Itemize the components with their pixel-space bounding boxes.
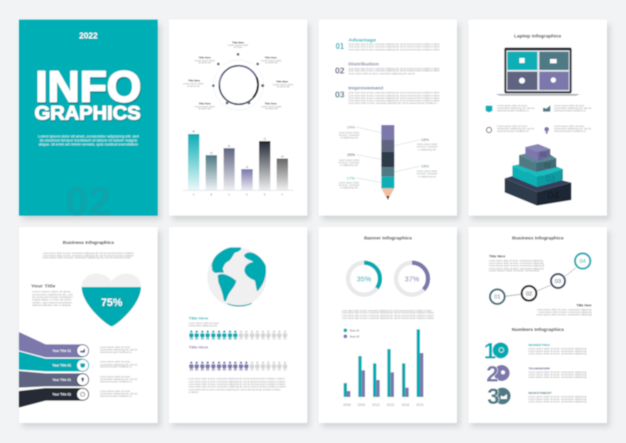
globe page text xyxy=(189,378,287,394)
ribbon descriptions: eiusmod tempor incididunt ut xyxy=(100,395,132,398)
list: advantage: Lorem ipsum dolor sit amet, consectetur adipiscing elit, sed do eiusmod tempor incididunt ut labore xyxy=(348,43,440,46)
bar chart: B xyxy=(211,194,213,196)
bar chart: 53 xyxy=(210,153,213,155)
panel: banner page xyxy=(319,227,457,423)
radial labels: Title Here xyxy=(188,79,201,83)
right pencil labels: sit amet, consectet xyxy=(417,146,438,149)
banner text xyxy=(342,309,435,320)
3D pyramid: 04 xyxy=(547,190,559,202)
list: advantage: Lorem ipsum dolor sit amet, consectetur adipiscing elit, sed do eiusmod tempor incididunt ut labore xyxy=(348,46,440,49)
list: advantage: 01 xyxy=(336,42,345,51)
laptop legend text: eiusmod tempor incididunt ut xyxy=(554,109,586,112)
list: distribution: 02 xyxy=(335,66,345,75)
bar chart: 64 xyxy=(228,146,231,148)
left pencil labels: ur adipiscing elit xyxy=(340,137,358,140)
radial labels: Title Here xyxy=(199,55,211,59)
left pencil labels: 17% xyxy=(347,175,355,180)
left pencil labels: ur adipiscing elit xyxy=(340,164,358,167)
cover text block: Lorem ipsum dolor sit amet, consectetur adipiscing elit, sed xyxy=(38,135,139,139)
your title block: Your Title xyxy=(31,284,56,289)
radial labels: Title Here xyxy=(232,40,245,44)
panel: business heart page xyxy=(19,227,158,423)
bar chart: 32 xyxy=(246,167,249,169)
title block top: Lorem ipsum dolor sit amet, consectetur adipiscing xyxy=(489,265,545,268)
left pencil labels: Lorem ipsum dolor xyxy=(339,182,359,185)
left pencil labels: 26% xyxy=(347,152,355,157)
step path: 03 xyxy=(555,279,561,285)
laptop legend text: Lorem ipsum dolor sit amet, xyxy=(554,125,585,128)
investment item: Lorem ipsum dolor sit amet, consectetur adipiscing xyxy=(528,400,587,403)
right pencil labels xyxy=(417,137,438,178)
list: distribution: Lorem ipsum dolor sit amet, consectetur adipiscing elit, sed do eiusmod tempor incididunt ut labore xyxy=(348,67,440,70)
ribbon descriptions: Lorem ipsum dolor sit amet, xyxy=(100,346,131,349)
laptop legend text: eiusmod tempor incididunt ut xyxy=(497,130,529,133)
marketing item: Lorem ipsum dolor sit amet, consectetur adipiscing xyxy=(528,352,587,355)
panel: business and numbers page xyxy=(468,227,607,423)
step path: 04 xyxy=(580,259,586,265)
bar chart: A xyxy=(193,193,195,196)
radial labels xyxy=(183,40,293,111)
right pencil labels: ur adipiscing elit xyxy=(418,175,436,178)
title block top: Lorem ipsum dolor sit amet, consectetur adipiscing xyxy=(489,259,544,262)
globe page text: Lorem ipsum dolor sit amet, consectetur adipiscing elit, sed do eiusmod tempor incididunt ut labore xyxy=(189,380,286,383)
intro text: Lorem ipsum dolor sit amet, consectetur adipiscing elit, sed do eiusmod tempor incididunt xyxy=(43,252,134,255)
laptop legend text: Lorem ipsum dolor sit amet, xyxy=(497,125,528,128)
ribbon descriptions: consectetur adipiscing elit, sed do xyxy=(100,363,138,366)
globe page text: ut labore. xyxy=(189,391,199,394)
banner text: Lorem ipsum dolor sit amet, consectetur adipiscing elit, sed do eiusmod tempor incididunt ut labore xyxy=(342,312,435,315)
title block top xyxy=(489,254,545,273)
bar chart: 48 xyxy=(281,156,284,158)
investment item: INVESTMENT xyxy=(528,391,552,395)
title block bottom xyxy=(536,303,592,317)
radial labels: Lorem ipsum dolor xyxy=(194,59,215,62)
number 1 xyxy=(484,339,509,364)
list: improvement: Lorem ipsum dolor sit amet, consectetur adipiscing elit, sed do eiusmod tempor incididunt ut labore xyxy=(348,97,440,100)
right pencil labels: sit amet, consectet xyxy=(417,173,438,176)
your title block: magna aliqua, ut enim ad minim xyxy=(32,299,71,302)
laptop legend text: Lorem ipsum dolor sit amet, xyxy=(554,104,585,107)
laptop legend text: Lorem ipsum dolor sit amet, xyxy=(497,104,528,107)
cover title GRAPHICS: GRAPHICS xyxy=(35,104,141,125)
step path: 01 xyxy=(494,295,500,301)
ribbon descriptions: Lorem ipsum dolor sit amet, xyxy=(100,361,131,364)
left pencil labels xyxy=(339,125,360,190)
number 1: 1 xyxy=(484,339,496,364)
radial labels: Lorem ipsum dolor xyxy=(194,105,215,108)
cover title INFO: INFO xyxy=(36,65,142,113)
cover title INFO: INFO xyxy=(35,64,141,112)
list: distribution: Distribution xyxy=(348,62,379,68)
donut 37%: 37% xyxy=(405,275,420,284)
3D pyramid: 03 xyxy=(546,174,555,184)
marketing item: Lorem ipsum dolor sit amet, consectetur adipiscing xyxy=(528,350,587,353)
list: distribution xyxy=(335,62,440,75)
teamwork item: Lorem ipsum dolor sit amet, consectetur adipiscing xyxy=(528,374,587,377)
donut 35%: 35% xyxy=(357,275,372,284)
right pencil labels: 18% xyxy=(421,137,429,142)
investment item: Lorem ipsum dolor sit amet, consectetur adipiscing xyxy=(528,395,587,398)
bar chart: 75 xyxy=(263,139,267,141)
grouped bar chart: 2012 xyxy=(372,403,380,407)
heading: Banner Infographics xyxy=(364,235,412,240)
left pencil labels: Lorem ipsum dolor xyxy=(339,131,359,134)
globe page text: Lorem ipsum dolor sit amet, consectetur adipiscing elit, sed do eiusmod tempor incididunt ut labore xyxy=(189,386,287,389)
radial labels: Lorem ipsum dolor xyxy=(261,59,282,62)
left pencil labels: sit amet, consectet xyxy=(339,134,360,137)
intro text: Lorem ipsum dolor sit amet, consectetur adipiscing elit, sed do eiusmod tempor incididunt xyxy=(43,254,134,257)
panel: radial and bar chart page xyxy=(169,20,307,216)
panel: cover xyxy=(19,20,158,224)
grouped bar chart: 2006 xyxy=(343,403,351,407)
investment item xyxy=(528,391,587,403)
radial labels: sit amet elit xyxy=(265,108,278,111)
your title block: do eiusmod tempor incididunt xyxy=(32,296,73,299)
laptop legend text: eiusmod tempor incididunt ut xyxy=(554,130,586,133)
grouped bar chart: 2018 xyxy=(401,403,409,407)
grouped bar chart: 2009 xyxy=(357,403,365,407)
ribbon descriptions: eiusmod tempor incididunt ut xyxy=(100,351,132,354)
heart gauge xyxy=(82,274,141,326)
radial labels: Title Here xyxy=(265,55,277,59)
people row 1 xyxy=(189,330,287,340)
banner text: Lorem ipsum dolor sit amet, consectetur adipiscing elit, sed do eiusmod tempor incididunt ut labore xyxy=(342,314,435,317)
bar chart: D xyxy=(246,194,248,196)
globe xyxy=(207,247,267,307)
cover text block: aliqua. Ut enim ad minim veniam, quis nostrud exercitation xyxy=(39,142,138,146)
legend: Step 01 xyxy=(350,328,360,332)
your title block: Lorem ipsum dolor sit amet, xyxy=(32,291,72,294)
ribbon descriptions xyxy=(100,346,138,398)
list: improvement: 03 xyxy=(335,91,345,100)
3D pyramid: 01 xyxy=(541,153,547,159)
panel: advantage and pencil page xyxy=(319,20,457,216)
3D pyramid: 02 xyxy=(544,163,551,169)
cover title GRAPHICS: GRAPHICS xyxy=(35,103,141,124)
banner text: Lorem ipsum dolor sit amet, consectetur adipiscing elit, sed do eiusmod tempor incididunt ut labore xyxy=(342,317,435,320)
pencil callouts xyxy=(356,127,420,182)
title block bottom: Title Here xyxy=(577,303,592,307)
radial labels: Lorem ipsum dolor xyxy=(228,44,248,47)
people row 2 xyxy=(189,361,287,371)
ribbon descriptions: Lorem ipsum dolor sit amet, xyxy=(100,375,131,378)
donut 37% xyxy=(396,263,428,295)
numbers heading: Numbers Infographics xyxy=(512,327,564,332)
radial labels: Lorem ipsum dolor xyxy=(273,83,293,86)
your title block: consectetur adipiscing elit, sed xyxy=(32,293,73,296)
radial labels: sit amet elit xyxy=(265,61,278,64)
cover text block: do eiusmod tempor incididunt ut labore et dolore magna xyxy=(40,138,137,142)
radial diagram xyxy=(212,53,264,110)
radial labels: sit amet elit xyxy=(198,61,211,64)
cover text block xyxy=(38,135,139,146)
radial labels: Lorem ipsum dolor xyxy=(183,83,204,86)
list: distribution: Lorem ipsum dolor sit amet, consectetur adipiscing elit, sed do xyxy=(348,72,416,75)
grouped bar chart: 2015 xyxy=(386,403,394,407)
teamwork item: Lorem ipsum dolor sit amet, consectetur adipiscing xyxy=(528,371,587,374)
grouped bar chart: 2021 xyxy=(416,403,424,407)
intro text: Lorem ipsum dolor sit amet, consectetur adipiscing elit, sed do eiusmod tempor xyxy=(42,257,131,260)
radial labels: sit amet elit xyxy=(198,108,211,111)
title block top: Lorem ipsum dolor sit amet, consectetur adipiscing xyxy=(489,262,544,265)
ribbon steps: Your Title 01 xyxy=(52,349,71,353)
cover year: 2022 xyxy=(79,31,98,41)
marketing item xyxy=(528,343,587,355)
list: improvement: Improvement xyxy=(348,86,384,92)
left pencil labels: ur adipiscing elit xyxy=(340,187,358,190)
bar chart: 85 xyxy=(192,132,196,134)
your title block: ullamco laboris nisi ut aliquip xyxy=(32,304,71,307)
banner text: Lorem ipsum dolor sit amet, consectetur adipiscing elit, sed do eiusmod tempor incididunt ut labore xyxy=(342,309,433,312)
ribbon descriptions: eiusmod tempor incididunt ut xyxy=(100,366,132,369)
people row 1 heading: Lorem ipsum dolor sit amet, xyxy=(189,322,220,325)
radial labels: Title Here xyxy=(276,79,289,83)
pencil xyxy=(381,125,394,200)
list: improvement: Lorem ipsum dolor sit amet, consectetur adipiscing elit, sed do eiusmod tempor incididunt ut labore xyxy=(348,92,440,95)
teamwork item: Lorem ipsum dolor sit amet, consectetur adipiscing xyxy=(528,376,587,379)
globe page text: Lorem ipsum dolor sit amet, consectetur adipiscing elit, sed do eiusmod tempor incididunt ut labore xyxy=(189,383,286,386)
right pencil labels: Lorem ipsum dolor xyxy=(417,170,437,173)
radial labels: sit amet xyxy=(234,46,243,49)
radial labels: sit amet elit xyxy=(277,86,290,89)
laptop legend text: consectetur adipiscing elit, sed do xyxy=(497,107,535,110)
people row 1 heading xyxy=(189,317,220,328)
cover watermark number: 02 xyxy=(66,178,111,224)
laptop legend icons xyxy=(486,105,550,134)
list: improvement xyxy=(335,86,440,105)
step path xyxy=(490,253,590,304)
title block top: Lorem ipsum dolor sit amet, consectetur xyxy=(489,270,540,273)
laptop heading: Laptop Infographics xyxy=(514,34,562,39)
ribbon descriptions: Lorem ipsum dolor sit amet, xyxy=(100,390,131,393)
list: distribution: Lorem ipsum dolor sit amet, consectetur adipiscing elit, sed do eiusmod tempor incididunt ut labore xyxy=(348,70,440,73)
teamwork item xyxy=(528,367,587,379)
left pencil labels: sit amet, consectet xyxy=(339,161,360,164)
ribbon descriptions: eiusmod tempor incididunt ut xyxy=(100,380,132,383)
right pencil labels: ur adipiscing elit xyxy=(418,148,436,151)
laptop legend text: consectetur adipiscing elit, sed do xyxy=(554,128,592,131)
panel: globe and people page xyxy=(169,227,307,423)
bar chart: C xyxy=(228,194,230,196)
bar chart xyxy=(183,132,294,196)
ribbon descriptions: consectetur adipiscing elit, sed do xyxy=(100,393,138,396)
list: improvement: Lorem ipsum dolor sit amet, consectetur adipiscing elit, sed do eiusmod tempor incididunt ut labore xyxy=(348,94,440,97)
heading: Business Infographics xyxy=(512,235,564,240)
list: advantage: Lorem ipsum dolor sit amet, consectetur adipiscing elit, sed do eiusmod tempor incididunt ut labore xyxy=(348,48,440,51)
title block bottom: Lorem ipsum dolor sit amet, consectetur adipiscing xyxy=(536,314,592,317)
teamwork item: TEAMWORK xyxy=(528,367,551,371)
marketing item: MARKETING xyxy=(528,343,551,347)
radial labels: Title Here xyxy=(199,101,211,105)
laptop legend text: consectetur adipiscing elit, sed do xyxy=(554,107,592,110)
title block bottom: Lorem ipsum dolor sit amet, consectetur adipiscing xyxy=(537,308,592,311)
number 3 xyxy=(487,384,511,409)
people row 1 heading: Title Here xyxy=(189,317,208,321)
marketing item: Lorem ipsum dolor sit amet, consectetur adipiscing xyxy=(528,347,587,350)
legend: Step 02 xyxy=(350,334,360,338)
legend xyxy=(343,328,360,338)
globe page text: Lorem ipsum dolor sit amet, consectetur adipiscing elit, sed do eiusmod tempor incididunt ut labore xyxy=(189,378,285,381)
radial labels: sit amet elit xyxy=(187,85,200,88)
left pencil labels: sit amet, consectet xyxy=(339,184,360,187)
bar chart: F xyxy=(282,194,284,196)
radial labels: Title Here xyxy=(265,101,277,105)
right pencil labels: 15% xyxy=(421,163,429,168)
ribbon steps: Your Title 01 xyxy=(52,393,71,397)
heart gauge: 75% xyxy=(101,297,123,309)
ribbon descriptions: consectetur adipiscing elit, sed do xyxy=(100,349,138,352)
radial labels: Lorem ipsum dolor xyxy=(261,105,282,108)
laptop xyxy=(496,48,580,96)
number 2 xyxy=(486,361,510,386)
list: advantage xyxy=(336,37,440,51)
title block top: Lorem ipsum dolor sit amet, consectetur adipiscing xyxy=(489,267,544,270)
number 2: 2 xyxy=(486,361,498,386)
step path: 02 xyxy=(526,291,532,297)
heading: Business Infographics xyxy=(63,240,114,245)
right pencil labels: Lorem ipsum dolor xyxy=(417,143,437,146)
laptop legend text: consectetur adipiscing elit, sed do xyxy=(497,128,535,131)
laptop legend text: eiusmod tempor incididunt ut xyxy=(497,109,529,112)
list: improvement: Lorem ipsum dolor sit amet, consectetur adipiscing elit, sed do eiusmod tempor incididunt ut labore xyxy=(348,100,440,103)
left pencil labels: 24% xyxy=(347,125,355,130)
intro text xyxy=(42,252,134,260)
panel: laptop page xyxy=(468,20,607,216)
ribbon steps: Your Title 01 xyxy=(52,378,71,382)
ribbon descriptions: consectetur adipiscing elit, sed do xyxy=(100,378,138,381)
globe page text: Lorem ipsum dolor sit amet, consectetur adipiscing elit, sed do eiusmod tempor incididunt ut labore xyxy=(189,388,281,391)
left pencil labels: Lorem ipsum dolor xyxy=(339,159,359,162)
your title block xyxy=(31,284,73,307)
bar chart: E xyxy=(264,194,266,196)
laptop legend text xyxy=(497,104,592,133)
number 3: 3 xyxy=(487,384,499,409)
ribbon steps: Your Title 01 xyxy=(52,364,71,368)
people row 2 heading: Title Here xyxy=(189,345,208,349)
title block top: Title Here xyxy=(489,254,505,258)
people row 1 heading: consectetur adipiscing elit xyxy=(189,325,217,328)
title block bottom: Lorem ipsum dolor sit amet, consectetur adipiscing xyxy=(538,311,592,314)
list: advantage: Advantage xyxy=(348,37,376,43)
your title block: veniam, quis nostrud exercitation xyxy=(32,301,73,304)
3D pyramid xyxy=(505,144,571,206)
grouped bar chart xyxy=(343,329,424,407)
ribbon steps xyxy=(19,332,89,408)
donut 35% xyxy=(348,263,380,295)
list: improvement: Lorem ipsum dolor sit amet, consectetur adipiscing elit, sed do eiusmod tempor incididunt ut xyxy=(348,102,437,105)
investment item: Lorem ipsum dolor sit amet, consectetur adipiscing xyxy=(528,398,587,401)
